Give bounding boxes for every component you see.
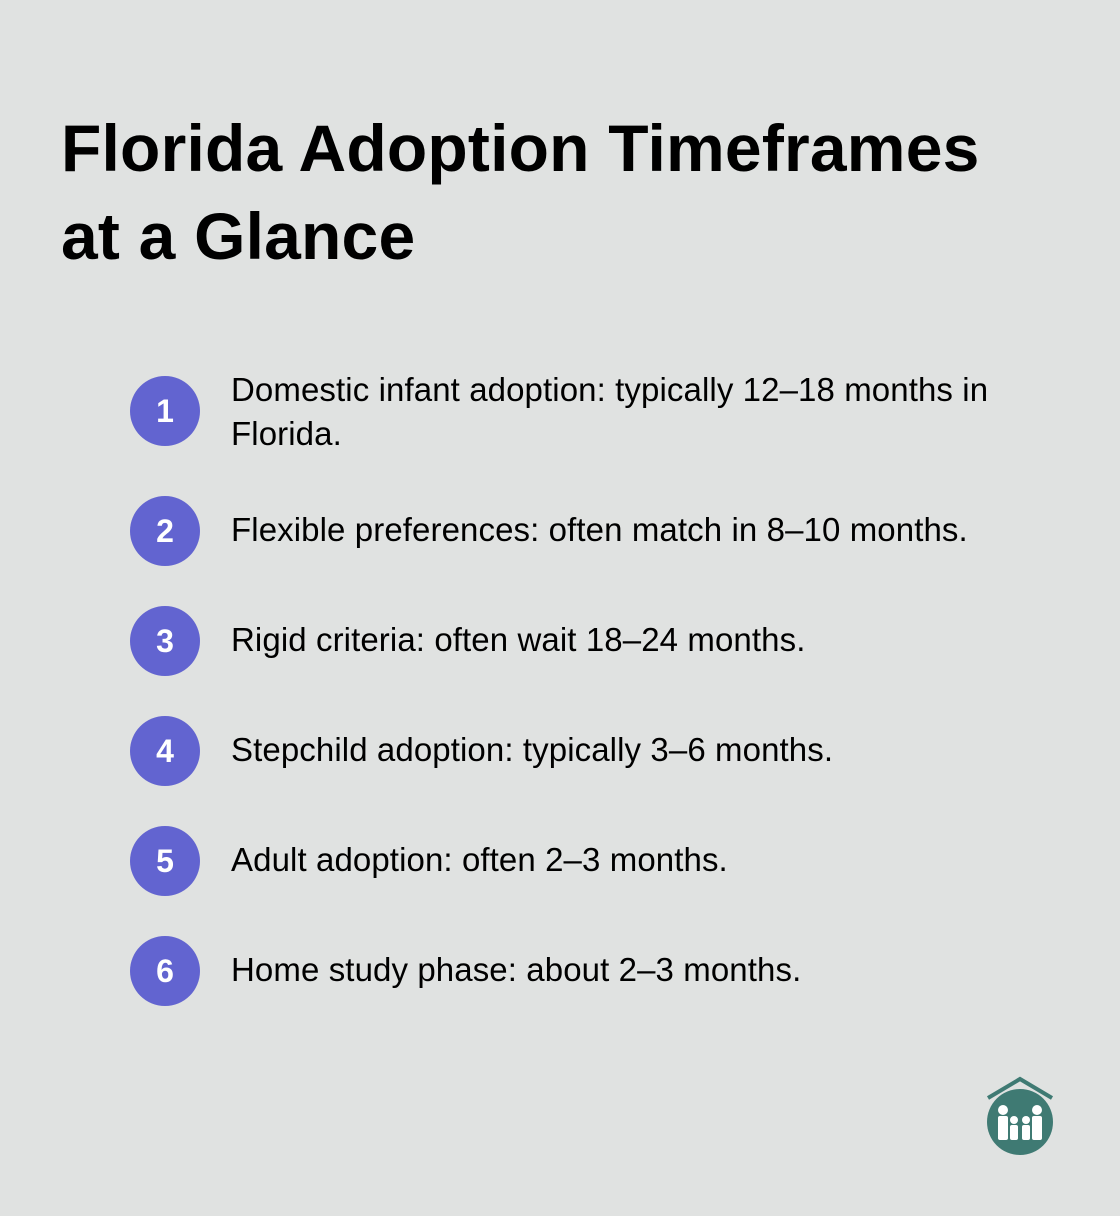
item 3: 3 <box>156 623 174 659</box>
title: Florida Adoption Timeframes <box>61 111 980 185</box>
item 6: Home study phase: about 2–3 months. <box>231 951 801 988</box>
item 1 <box>130 371 988 452</box>
item 5 <box>130 826 728 896</box>
item 2: Flexible preferences: often match in 8–10 months. <box>231 511 968 548</box>
item 4: Stepchild adoption: typically 3–6 months. <box>231 731 833 768</box>
item 2: 2 <box>156 513 174 549</box>
title: at a Glance <box>61 199 415 273</box>
item 5: 5 <box>156 843 174 879</box>
item 5: Adult adoption: often 2–3 months. <box>231 841 728 878</box>
item 1: Florida. <box>231 415 342 452</box>
item 3 <box>130 606 805 676</box>
item 3: Rigid criteria: often wait 18–24 months. <box>231 621 805 658</box>
item 1: 1 <box>156 393 174 429</box>
item 6: 6 <box>156 953 174 989</box>
item 1: Domestic infant adoption: typically 12–18 months in <box>231 371 988 408</box>
title <box>61 111 980 273</box>
item 2 <box>130 496 968 566</box>
item 4 <box>130 716 833 786</box>
item 6 <box>130 936 801 1006</box>
icon: logo <box>987 1076 1053 1155</box>
item 4: 4 <box>156 733 174 769</box>
